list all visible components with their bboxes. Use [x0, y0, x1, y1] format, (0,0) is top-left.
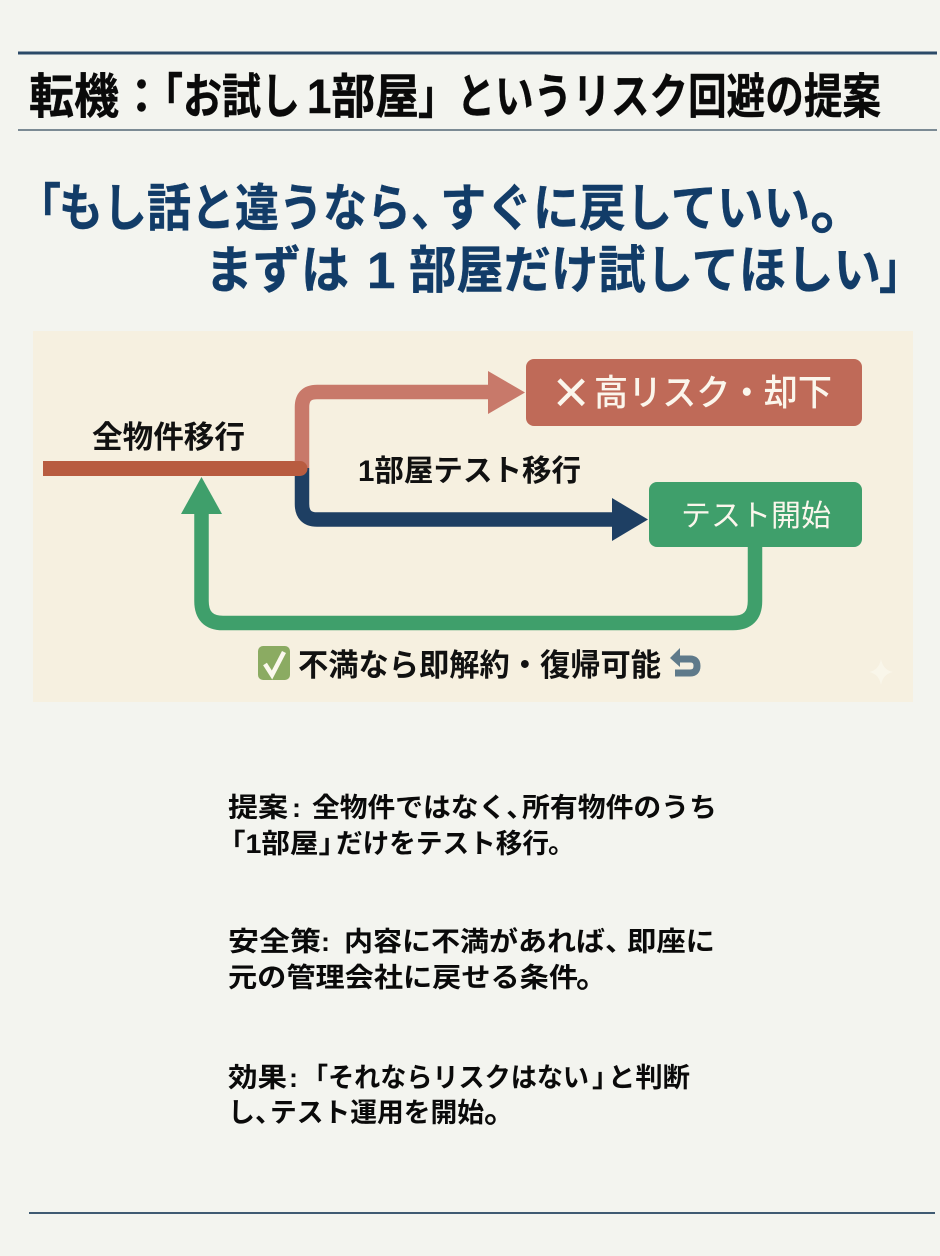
text block: effect: 」 [592, 1063, 619, 1093]
quote headline [17, 173, 923, 299]
box: test start: テスト開始 [681, 500, 831, 533]
text block: effect: 効果 [228, 1063, 287, 1093]
text block: safety measure: 即座に [627, 927, 715, 957]
text block: effect: テスト運用を開始 [270, 1098, 484, 1128]
text block: safety measure: 安全策 [228, 927, 321, 957]
box: high risk rejected: × [553, 358, 589, 427]
arrow: high risk branch [302, 371, 525, 468]
text block: proposal: 。 [548, 829, 575, 859]
panel: flow diagram [33, 331, 913, 702]
icon: sparkle [869, 659, 893, 685]
text block: proposal: だけをテスト移行 [336, 829, 549, 859]
icon: return arrow [670, 648, 697, 673]
title: 「お試し [144, 71, 300, 124]
box: test start [649, 482, 862, 547]
line end cap [292, 461, 308, 476]
box: high risk rejected: 高リスク・却下 [594, 372, 832, 413]
text block: effect: 。 [484, 1092, 517, 1129]
quote headline: 」 [879, 242, 923, 299]
title [29, 71, 881, 124]
text block: safety measure: 。 [576, 957, 609, 994]
quote headline: まずは [205, 242, 349, 299]
text block: effect: と判断 [608, 1063, 690, 1093]
quote headline: 1 [367, 242, 395, 299]
label: cancel anytime: 不満なら即解約・復帰可能 [298, 648, 661, 683]
text block: proposal: 提案 [228, 793, 288, 823]
title: 転機 [29, 71, 119, 124]
arrow: all properties line [43, 461, 300, 476]
text block: effect: し、 [228, 1098, 282, 1128]
text block: safety measure: 元の管理会社に戻せる条件 [228, 963, 578, 993]
text block: safety measure: : [321, 927, 330, 957]
quote headline: 「 [17, 180, 61, 237]
text block: effect [228, 1063, 690, 1129]
text block: proposal [217, 793, 717, 859]
label: all properties: 全物件移行 [92, 420, 245, 455]
arrow: test branch [302, 468, 648, 541]
title: ： [120, 71, 164, 124]
quote headline: 部屋だけ試してほしい [409, 242, 881, 299]
title: 1部屋 [307, 71, 419, 124]
text block: safety measure: 内容に不満があれば、 [344, 926, 634, 957]
text block: proposal: : [292, 793, 301, 823]
quote headline: もし話と違うなら、 [59, 180, 455, 237]
arrow: green return [181, 477, 755, 623]
quote headline: 。 [810, 173, 872, 242]
box: high risk rejected [526, 358, 862, 427]
quote headline: すぐに戻していい [440, 180, 810, 237]
text block: safety measure [228, 926, 715, 994]
label: one room test: 1部屋テスト移行 [358, 455, 581, 488]
icon: check mark [258, 646, 290, 680]
text block: proposal: 全物件ではなく、 [312, 793, 534, 823]
text block: proposal: 所有物件のうち [522, 793, 717, 823]
text block: effect: 「それならリスクはない [302, 1063, 589, 1093]
text block: effect: : [289, 1063, 298, 1093]
text block: proposal: 「1部屋」 [217, 829, 347, 859]
